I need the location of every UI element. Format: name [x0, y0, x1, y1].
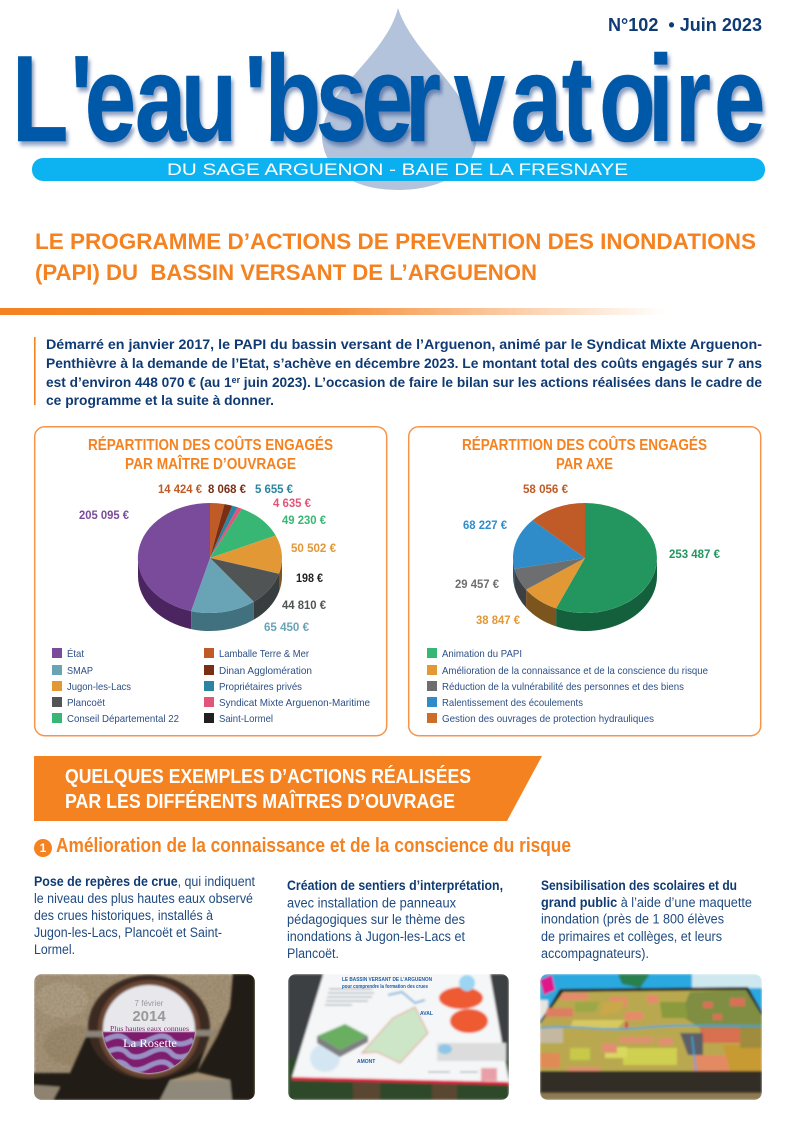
legend: Réduction de la vulnérabilité des personnes et des biens	[442, 681, 684, 693]
text column 1: Pose de repères de crue, qui indiquent	[34, 874, 255, 889]
pie chart	[513, 503, 657, 631]
panel inscriptions: LE BASSIN VERSANT DE L'ARGUENON	[342, 977, 432, 983]
legend: Lamballe Terre & Mer	[219, 648, 309, 660]
gradient rule	[0, 308, 666, 315]
marker inscriptions: Plus hautes eaux connues	[110, 1024, 189, 1033]
text column 1: des crues historiques, installés à	[34, 908, 213, 923]
text column 3: Sensibilisation des scolaires et du	[541, 878, 737, 893]
legend: Conseil Départemental 22	[67, 713, 179, 725]
photo: flood model	[540, 974, 762, 1100]
section banner: QUELQUES EXEMPLES D’ACTIONS RÉALISÉES	[65, 765, 471, 788]
text column 2: pédagogiques sur le thème des	[287, 912, 465, 927]
legend: Propriétaires privés	[219, 681, 302, 693]
text column 1: le niveau des plus hautes eaux observé	[34, 891, 253, 906]
legend: Saint-Lormel	[219, 713, 273, 725]
legend: Gestion des ouvrages de protection hydrauliques	[442, 713, 654, 725]
marker inscriptions	[110, 999, 189, 1050]
subtitle bar	[32, 158, 765, 181]
panel: costs by project owner	[35, 427, 387, 736]
legend: État	[67, 647, 84, 660]
main heading: LE PROGRAMME D’ACTIONS DE PREVENTION DES INONDATIONS	[35, 229, 756, 254]
value labels: 198 €	[296, 573, 324, 585]
intro text: Penthièvre à la demande de l’Etat, s’achève en décembre 2023. Le montant total des coûts engagés sur 7 ans	[46, 355, 762, 371]
text column 2	[287, 878, 503, 961]
photo: flood marker	[33, 974, 255, 1100]
photo: interpretation panel	[288, 974, 509, 1100]
panel heading	[88, 436, 333, 473]
panel inscriptions: AMONT	[357, 1059, 375, 1065]
legend: Animation du PAPI	[442, 648, 522, 660]
panel: costs by axis	[409, 427, 761, 736]
panel heading: RÉPARTITION DES COÛTS ENGAGÉS	[88, 436, 333, 454]
panel inscriptions	[342, 977, 433, 1065]
panel heading: PAR MAÎTRE D’OUVRAGE	[125, 455, 296, 473]
subtitle: DU SAGE ARGUENON - BAIE DE LA FRESNAYE	[167, 160, 628, 179]
value labels: 44 810 €	[282, 600, 327, 612]
marker inscriptions: 2014	[132, 1008, 166, 1025]
value labels: 65 450 €	[264, 622, 310, 634]
value labels	[455, 484, 721, 627]
value labels: 205 095 €	[79, 510, 130, 522]
legend: Syndicat Mixte Arguenon-Maritime	[219, 697, 370, 709]
text column 2: avec installation de panneaux	[287, 896, 456, 910]
section banner	[34, 756, 542, 821]
value labels: 50 502 €	[291, 543, 337, 555]
text column 3: inondation (près de 1 800 élèves	[541, 912, 724, 926]
legend: Ralentissement des écoulements	[442, 697, 583, 709]
legend: SMAP	[67, 665, 93, 677]
logo title: L'eau'bservatoire	[12, 31, 765, 168]
legend: Jugon-les-Lacs	[67, 681, 131, 693]
subheading 1: Amélioration de la connaissance et de la conscience du risque	[56, 835, 571, 857]
issue number: N°102 • Juin 2023	[608, 14, 762, 35]
legend	[427, 648, 708, 725]
masthead	[12, 8, 765, 190]
section banner: PAR LES DIFFÉRENTS MAÎTRES D’OUVRAGE	[65, 789, 455, 813]
intro text: est d’environ 448 070 € (au 1	[46, 374, 236, 390]
intro text	[34, 336, 762, 408]
intro text: ce programme et la suite à donner.	[46, 392, 274, 408]
value labels: 58 056 €	[523, 484, 569, 496]
marker inscriptions: 7 février	[135, 999, 164, 1008]
value labels: 14 424 €	[158, 484, 203, 496]
text column 3	[541, 878, 752, 961]
value labels: 49 230 €	[282, 515, 327, 527]
value labels: 29 457 €	[455, 579, 500, 591]
text column 2: inondations à Jugon-les-Lacs et	[287, 929, 465, 944]
main heading: (PAPI) DU BASSIN VERSANT DE L’ARGUENON	[35, 260, 537, 285]
intro text: Démarré en janvier 2017, le PAPI du bassin versant de l’Arguenon, animé par le Syndicat Mixte Arguenon-	[46, 336, 762, 352]
marker inscriptions: La Rosette	[123, 1036, 177, 1050]
text column 2: Création de sentiers d’interprétation,	[287, 878, 503, 893]
legend: Plancoët	[67, 697, 105, 709]
text column 1	[34, 874, 255, 957]
value labels: 253 487 €	[669, 549, 721, 561]
value labels: 5 655 €	[255, 484, 294, 496]
panel heading: PAR AXE	[556, 456, 613, 473]
pie chart	[138, 503, 282, 631]
legend: Dinan Agglomération	[219, 665, 312, 677]
legend	[52, 647, 370, 725]
panel heading: RÉPARTITION DES COÛTS ENGAGÉS	[462, 436, 707, 454]
panel inscriptions: AVAL	[420, 1011, 433, 1017]
text column 2: Plancoët.	[287, 946, 339, 961]
legend: Amélioration de la connaissance et de la conscience du risque	[442, 665, 708, 677]
intro text: er	[232, 375, 240, 385]
panel inscriptions: pour comprendre la formation des crues	[342, 984, 428, 990]
water drop	[322, 8, 476, 190]
value labels: 68 227 €	[463, 520, 508, 532]
value labels	[79, 484, 337, 634]
main heading	[35, 229, 756, 285]
text column 3: accompagnateurs).	[541, 946, 649, 961]
text column 1: Lormel.	[34, 942, 75, 957]
subheading 1: 1	[40, 841, 47, 855]
value labels: 8 068 €	[208, 484, 247, 496]
value labels: 38 847 €	[476, 615, 521, 627]
value labels: 4 635 €	[273, 498, 312, 510]
panel heading	[462, 436, 707, 473]
text column 3: de primaires et collèges, et leurs	[541, 929, 722, 944]
text column 3: grand public à l’aide d’une maquette	[541, 895, 752, 910]
text column 1: Jugon-les-Lacs, Plancoët et Saint-	[34, 925, 222, 940]
intro text: juin 2023). L’occasion de faire le bilan sur les actions réalisées dans le cadre de	[240, 374, 762, 390]
